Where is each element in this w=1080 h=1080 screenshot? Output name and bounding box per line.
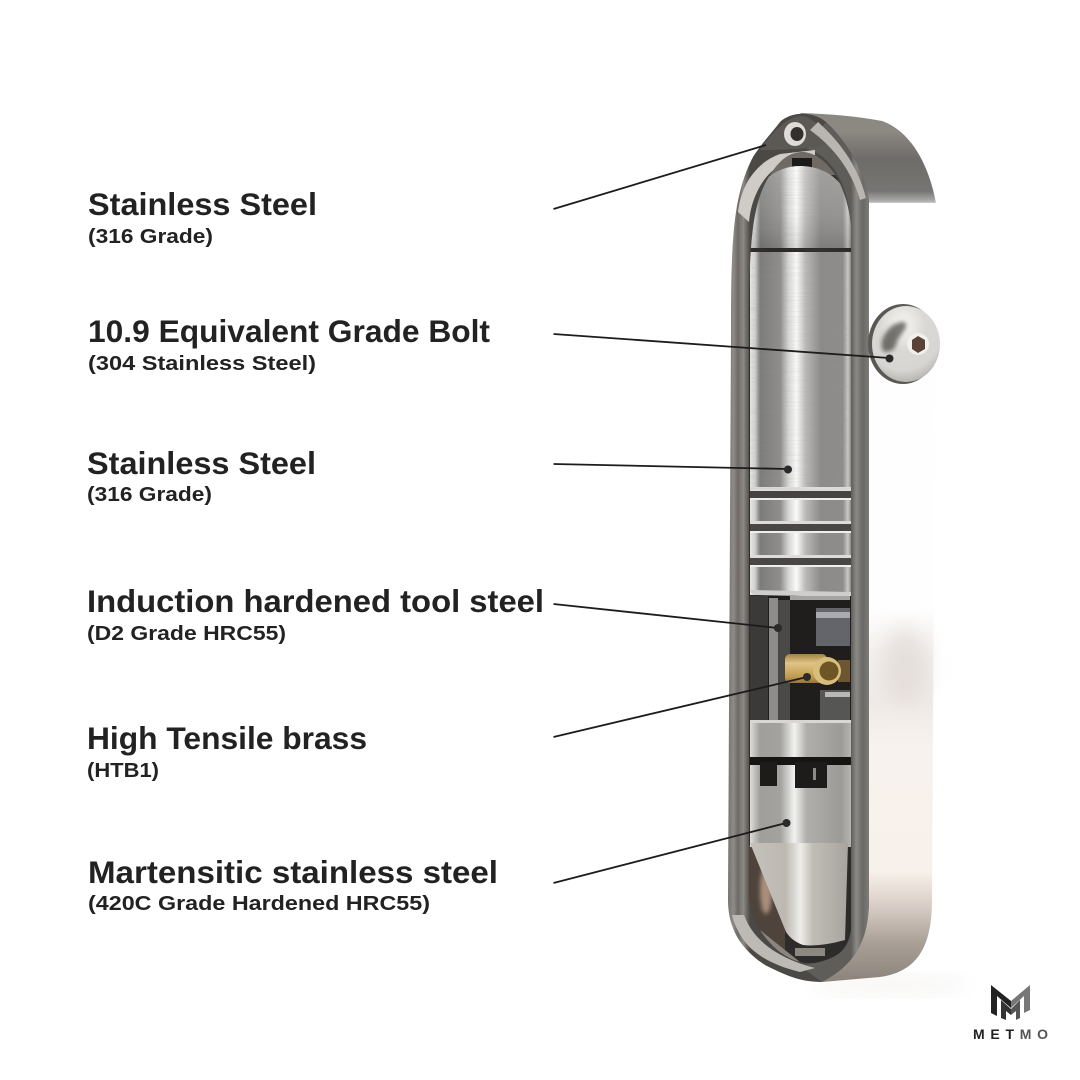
label: 10.9 Equivalent Grade Bolt: (304 Stainless Steel) [88, 352, 316, 375]
bolt [868, 304, 940, 384]
label: 10.9 Equivalent Grade Bolt: 10.9 Equivalent Grade Bolt [88, 313, 491, 349]
product: metal tool cutaway [728, 113, 970, 992]
logo mark [991, 985, 1030, 1020]
label: Stainless Steel 316 second: Stainless Steel [87, 445, 316, 481]
label: Induction hardened tool steel: Induction hardened tool steel [87, 583, 544, 619]
bottom frame highlight [732, 915, 815, 972]
cavity [745, 145, 855, 970]
front frame: top highlight band [738, 150, 815, 222]
label: High Tensile brass [87, 720, 367, 782]
leader line: martensitic steel [554, 819, 790, 883]
back side: upper shaded edge [800, 113, 936, 203]
capsule body [750, 252, 851, 487]
label: Stainless Steel 316 second: (316 Grade) [87, 483, 212, 506]
side panel: brushed face [822, 203, 936, 982]
label: Martensitic stainless steel: Martensitic stainless steel [88, 854, 498, 890]
cone tip [750, 843, 848, 945]
front frame [728, 114, 869, 982]
label: High Tensile brass: High Tensile brass [87, 720, 367, 756]
logo wordmark: MET MO [973, 1026, 1048, 1042]
icon: eyelet hole [784, 122, 806, 146]
leader line: tool steel [554, 604, 782, 632]
label: Induction hardened tool steel: (D2 Grade HRC55) [87, 622, 286, 645]
label: Martensitic stainless steel: (420C Grade Hardened HRC55) [88, 892, 430, 915]
lug around eyelet [760, 116, 832, 150]
ground shadow [810, 978, 970, 992]
internal cavity parts [768, 596, 851, 720]
leader line: stainless steel capsule [554, 464, 792, 474]
label: High Tensile brass: (HTB1) [87, 759, 159, 782]
logo: METMO [973, 985, 1048, 1042]
label: Martensitic stainless steel [88, 854, 498, 915]
label: Stainless Steel 316 second [87, 445, 316, 506]
hex socket [912, 336, 925, 353]
label: Stainless Steel 316: Stainless Steel [88, 186, 317, 222]
lower left reflection [749, 845, 785, 950]
grooved rings [750, 500, 851, 595]
leader line: stainless steel frame [554, 145, 766, 209]
capsule dome [750, 166, 851, 248]
label: Stainless Steel 316 [88, 186, 317, 248]
brushed texture overlay [750, 170, 851, 490]
collar block [750, 720, 851, 757]
leader line: brass [554, 673, 811, 737]
capsule seam [750, 250, 751, 252]
notched cylinder [750, 757, 851, 847]
label: 10.9 Equivalent Grade Bolt [88, 313, 491, 375]
brass pin [785, 654, 850, 685]
leader line: bolt [554, 334, 894, 362]
label: Stainless Steel 316: (316 Grade) [88, 225, 213, 248]
front frame: right band [800, 122, 869, 982]
label: Induction hardened tool steel [87, 583, 544, 645]
